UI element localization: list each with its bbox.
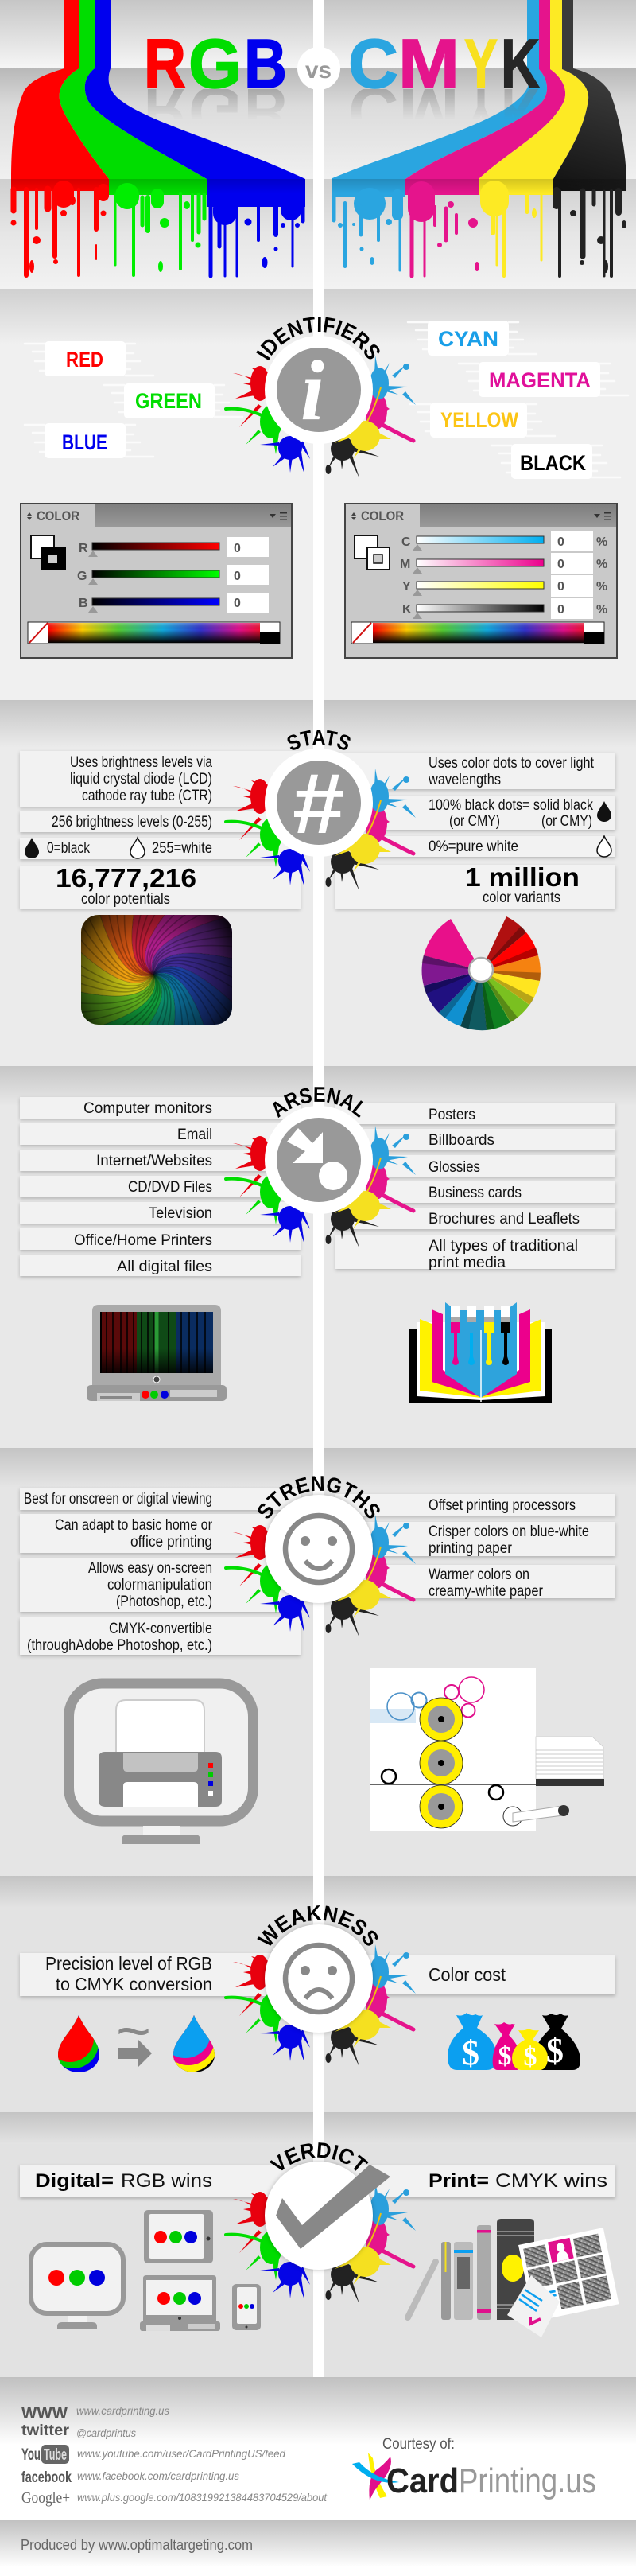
title reflection: B	[244, 72, 287, 150]
icon: info i: i	[301, 344, 324, 438]
www: www.cardprinting.us	[76, 2404, 169, 2417]
icon: print media	[408, 2219, 619, 2337]
item: Allows easy on-screen	[88, 1560, 212, 1577]
image: color fan	[422, 916, 541, 1030]
facebook: facebook	[21, 2469, 72, 2486]
panel: pure white	[335, 836, 615, 857]
slider R: R	[79, 542, 88, 555]
youtube: You	[21, 2446, 41, 2464]
title reflection: G	[188, 72, 242, 150]
panel: weakness left: to CMYK conversion	[56, 1974, 212, 1994]
item: All types of traditional	[429, 1238, 578, 1255]
panel: brightness: liquid crystal diode (LCD)	[70, 771, 212, 788]
icon: money bags	[448, 2013, 580, 2072]
strengths left list	[20, 1488, 301, 1655]
title: K	[501, 25, 540, 103]
panel: pure white: 0%=pure white	[429, 839, 518, 855]
hero background	[0, 0, 636, 289]
stats right panels	[335, 753, 615, 909]
icon: digital devices	[31, 2210, 261, 2331]
icon: sad face	[285, 1945, 352, 2012]
tile: black: BLACK	[520, 451, 586, 475]
item: (Photoshop, etc.)	[116, 1593, 212, 1610]
panel: brightness: cathode ray tube (CTR)	[82, 788, 212, 804]
item: Crisper colors on blue-white	[429, 1523, 589, 1540]
section 5 background: strengths	[0, 1448, 636, 1876]
spectrum	[28, 622, 280, 644]
black drips	[556, 191, 626, 276]
panel: solid black	[335, 796, 615, 830]
item	[20, 1558, 301, 1612]
panel: weakness right	[335, 1955, 615, 1994]
icon: money bags: $	[546, 2031, 564, 2070]
item: (throughAdobe Photoshop, etc.)	[27, 1637, 212, 1654]
emblem: weakness	[224, 1905, 416, 2067]
youtube: Tube	[44, 2446, 67, 2464]
tile: red	[25, 341, 153, 376]
emblem: strengths	[224, 1476, 416, 1637]
panel: verdict right	[335, 2165, 615, 2197]
tile: black	[491, 444, 620, 479]
item	[20, 1123, 301, 1145]
tile: cyan	[408, 321, 537, 356]
heading: identifiers: IDENTIFIERS	[256, 317, 380, 361]
section 6 background: weakness	[0, 1876, 636, 2112]
title reflection: Y	[464, 72, 498, 150]
RGB paint flow with drips	[11, 0, 305, 276]
slider K	[402, 598, 607, 619]
item	[335, 1522, 615, 1557]
item: Brochures and Leaflets	[429, 1211, 580, 1228]
tile: cyan: CYAN	[438, 327, 498, 351]
tablet	[144, 2210, 213, 2263]
tile: red: RED	[66, 348, 103, 372]
panel: black and white values: 255=white	[152, 840, 212, 857]
slider G	[77, 565, 269, 585]
section 2 background: identifiers	[0, 289, 636, 700]
facebook: www.facebook.com/cardprinting.us	[77, 2469, 239, 2482]
item	[335, 1155, 615, 1177]
tile: blue: BLUE	[62, 430, 107, 454]
item: Business cards	[429, 1185, 522, 1201]
slider B: 0	[234, 597, 241, 610]
item	[335, 1181, 615, 1203]
google plus	[21, 2489, 328, 2507]
item: printing paper	[429, 1540, 513, 1557]
slider Y: 0	[557, 580, 564, 593]
stats left panels	[20, 751, 301, 909]
item	[335, 1103, 615, 1124]
item: Warmer colors on	[429, 1566, 529, 1583]
panel: brightness	[20, 751, 301, 807]
slider C: 0	[557, 535, 564, 549]
panel: color potentials: color potentials	[81, 891, 170, 908]
title reflection	[148, 89, 538, 114]
slider B: B	[79, 597, 88, 610]
panel: black and white values: 0=black	[47, 840, 90, 857]
panel: verdict right: Print=	[429, 2170, 489, 2192]
slider Y: %	[596, 580, 607, 593]
title reflection: M	[398, 72, 460, 150]
item	[335, 1208, 615, 1229]
item	[20, 1097, 301, 1119]
google plus: Google+	[21, 2489, 70, 2507]
note page	[507, 2275, 560, 2337]
tile: green	[104, 383, 242, 418]
icon: RGB drop	[58, 2015, 99, 2072]
icon: check mark	[276, 2165, 390, 2249]
panel: verdict left: RGB wins	[121, 2170, 212, 2192]
blue drips	[211, 207, 303, 276]
panel: color dots: Uses color dots to cover light	[429, 755, 595, 772]
title: M	[398, 25, 460, 103]
desktop monitor	[31, 2244, 123, 2329]
books	[408, 2219, 534, 2320]
slider K: 0	[557, 603, 564, 617]
icon: offset press diagram	[370, 1668, 604, 1831]
icon: approximately arrow: ~	[116, 1998, 151, 2064]
heading: arsenal: ARSENAL	[273, 1087, 363, 1119]
logo: CardPrinting.us: Printing.us	[459, 2461, 596, 2500]
www	[21, 2404, 169, 2422]
title: B	[244, 25, 287, 103]
slider Y: Y	[402, 580, 411, 593]
panel: weakness right: Color cost	[429, 1964, 506, 1985]
social links	[21, 2404, 328, 2507]
item	[20, 1617, 301, 1655]
item: Billboards	[429, 1132, 494, 1149]
item: All digital files	[117, 1259, 212, 1275]
green drips	[115, 193, 204, 275]
item: CMYK-convertible	[109, 1621, 212, 1637]
title: C	[348, 25, 398, 103]
tile: magenta: MAGENTA	[489, 368, 591, 392]
section 4 background: arsenal	[0, 1066, 636, 1448]
footer background	[0, 2377, 636, 2576]
yellow drips	[493, 195, 541, 276]
item	[335, 1129, 615, 1150]
item	[335, 1565, 615, 1600]
panel: verdict left: Digital=	[35, 2170, 114, 2192]
title: Y	[464, 25, 498, 103]
laptop	[140, 2275, 220, 2331]
item	[20, 1228, 301, 1250]
item	[335, 1494, 615, 1516]
printer	[99, 1700, 222, 1807]
twitter: twitter	[21, 2422, 70, 2439]
color label: COLOR	[37, 508, 80, 523]
vs badge	[297, 47, 340, 90]
section 7 background: verdict	[0, 2112, 636, 2377]
strengths right list	[335, 1494, 615, 1600]
identifier tiles	[25, 321, 628, 479]
cyan drips	[334, 195, 400, 270]
title reflection: R	[144, 72, 186, 150]
item	[20, 1176, 301, 1197]
title: G	[188, 25, 242, 103]
icon: monitor with printer	[68, 1683, 253, 1844]
slider K: K	[402, 603, 412, 617]
title: R	[144, 25, 186, 103]
tile: blue	[25, 423, 153, 458]
magenta drips	[412, 195, 479, 276]
heading: stats: STATS	[288, 730, 351, 750]
panel: solid black: (or CMY)	[449, 813, 500, 830]
panel: color dots: wavelengths	[428, 772, 501, 788]
item: Office/Home Printers	[74, 1232, 212, 1249]
panel: verdict left	[20, 2165, 301, 2197]
icon: open book with pens	[409, 1302, 552, 1403]
panel: verdict right: CMYK wins	[495, 2170, 607, 2192]
panel: color potentials: 16,777,216	[56, 863, 196, 893]
item: print media	[429, 1255, 506, 1271]
arsenal left list	[20, 1097, 301, 1276]
slider G: 0	[234, 570, 241, 583]
icon: money bags: $	[523, 2042, 537, 2072]
slider C: %	[596, 535, 607, 549]
emblem: verdict	[224, 2142, 416, 2304]
item: office printing	[130, 1534, 212, 1551]
item: Glossies	[429, 1159, 480, 1176]
image: rainbow swirl	[81, 915, 232, 1025]
item: CD/DVD Files	[128, 1179, 212, 1196]
item	[20, 1202, 301, 1224]
google plus: www.plus.google.com/108319921384483704529/about	[77, 2491, 328, 2504]
youtube: www.youtube.com/user/CardPrintingUS/feed	[77, 2447, 286, 2460]
item	[20, 1488, 301, 1510]
slider R: 0	[234, 542, 241, 555]
icon: smiley	[285, 1516, 352, 1582]
panel: brightness: Uses brightness levels via	[70, 754, 212, 771]
item	[335, 1235, 615, 1271]
slider M	[400, 553, 607, 574]
tile: green: GREEN	[135, 389, 202, 413]
panel: weakness left	[20, 1953, 301, 1996]
slider C	[401, 531, 607, 551]
newspaper	[518, 2228, 619, 2321]
swatches	[355, 535, 390, 570]
title reflection: C	[348, 72, 398, 150]
tile: yellow	[410, 403, 555, 438]
central white divider strip	[313, 0, 324, 2377]
icon: money bags: $	[498, 2041, 512, 2071]
arsenal right list	[335, 1103, 615, 1271]
emblem: identifiers	[224, 317, 416, 478]
item	[20, 1150, 301, 1171]
vs badge: vs	[305, 57, 332, 84]
logo: CardPrinting.us: Card	[386, 2461, 459, 2500]
tile: yellow: YELLOW	[440, 408, 518, 432]
icon: CMYK drop	[173, 2015, 215, 2072]
heading: strengths: STRENGTHS	[258, 1476, 380, 1518]
item: Email	[177, 1127, 212, 1143]
panel: color dots	[335, 753, 615, 789]
icon: computer with binary rain	[87, 1305, 227, 1401]
logo: CardPrinting.us	[352, 2453, 596, 2500]
item	[20, 1514, 301, 1553]
slider M: M	[400, 558, 410, 571]
www: WWW	[21, 2404, 68, 2422]
section 3 background: stats	[0, 700, 636, 1066]
emblem: stats	[224, 730, 416, 891]
emblem: arsenal	[224, 1087, 416, 1248]
slider B	[79, 593, 269, 613]
panel: RGB color picker	[21, 504, 292, 658]
panel: color variants: 1 million	[465, 862, 580, 892]
panel: solid black: (or CMY)	[541, 813, 592, 830]
panel: weakness left: Precision level of RGB	[45, 1953, 212, 1974]
icon: money bags: $	[462, 2033, 479, 2072]
pens	[451, 1306, 510, 1365]
twitter	[21, 2422, 136, 2439]
facebook	[21, 2469, 239, 2486]
title	[144, 25, 540, 103]
item: Television	[149, 1205, 212, 1222]
slider R	[79, 537, 269, 557]
slider K: %	[596, 603, 607, 617]
panel: solid black: 100% black dots= solid black	[429, 797, 593, 814]
CMYK paint flow with drips	[332, 0, 626, 276]
twitter: @cardprintus	[76, 2426, 136, 2439]
red drips	[11, 189, 107, 275]
tile: magenta	[459, 362, 628, 397]
panel: levels: 256 brightness levels (0-255)	[52, 814, 212, 831]
slider M: 0	[557, 558, 564, 571]
producer credit: Produced by www.optimaltargeting.com	[21, 2537, 253, 2553]
item: Offset printing processors	[429, 1497, 576, 1514]
panel: color variants	[335, 862, 615, 909]
icon: arrow to circle	[287, 1128, 347, 1190]
item: Best for onscreen or digital viewing	[24, 1491, 212, 1508]
item: colormanipulation	[107, 1577, 212, 1593]
panel: color potentials	[20, 863, 301, 909]
slider G: G	[77, 570, 87, 583]
courtesy text: Courtesy of:	[382, 2436, 455, 2453]
panel: CMYK color picker	[345, 504, 617, 658]
item	[20, 1255, 301, 1276]
icon: hash: #	[293, 755, 344, 851]
panel: levels	[20, 811, 301, 832]
item: Can adapt to basic home or	[55, 1517, 213, 1534]
swatches	[31, 535, 66, 570]
slider C: C	[401, 535, 411, 549]
item: Internet/Websites	[96, 1153, 212, 1169]
phone	[232, 2284, 261, 2330]
item: Posters	[429, 1107, 475, 1123]
slider M: %	[596, 558, 607, 571]
color label: COLOR	[361, 508, 404, 523]
item: Computer monitors	[83, 1100, 212, 1117]
title reflection: K	[501, 72, 540, 150]
heading: weakness: WEAKNESS	[257, 1905, 378, 1946]
youtube	[21, 2445, 286, 2464]
item: creamy-white paper	[429, 1583, 544, 1600]
panel: color variants: color variants	[483, 889, 560, 906]
panel: black and white values	[20, 838, 301, 859]
spectrum	[351, 622, 604, 644]
heading: verdict: VERDICT	[269, 2142, 369, 2171]
slider Y	[402, 575, 607, 597]
